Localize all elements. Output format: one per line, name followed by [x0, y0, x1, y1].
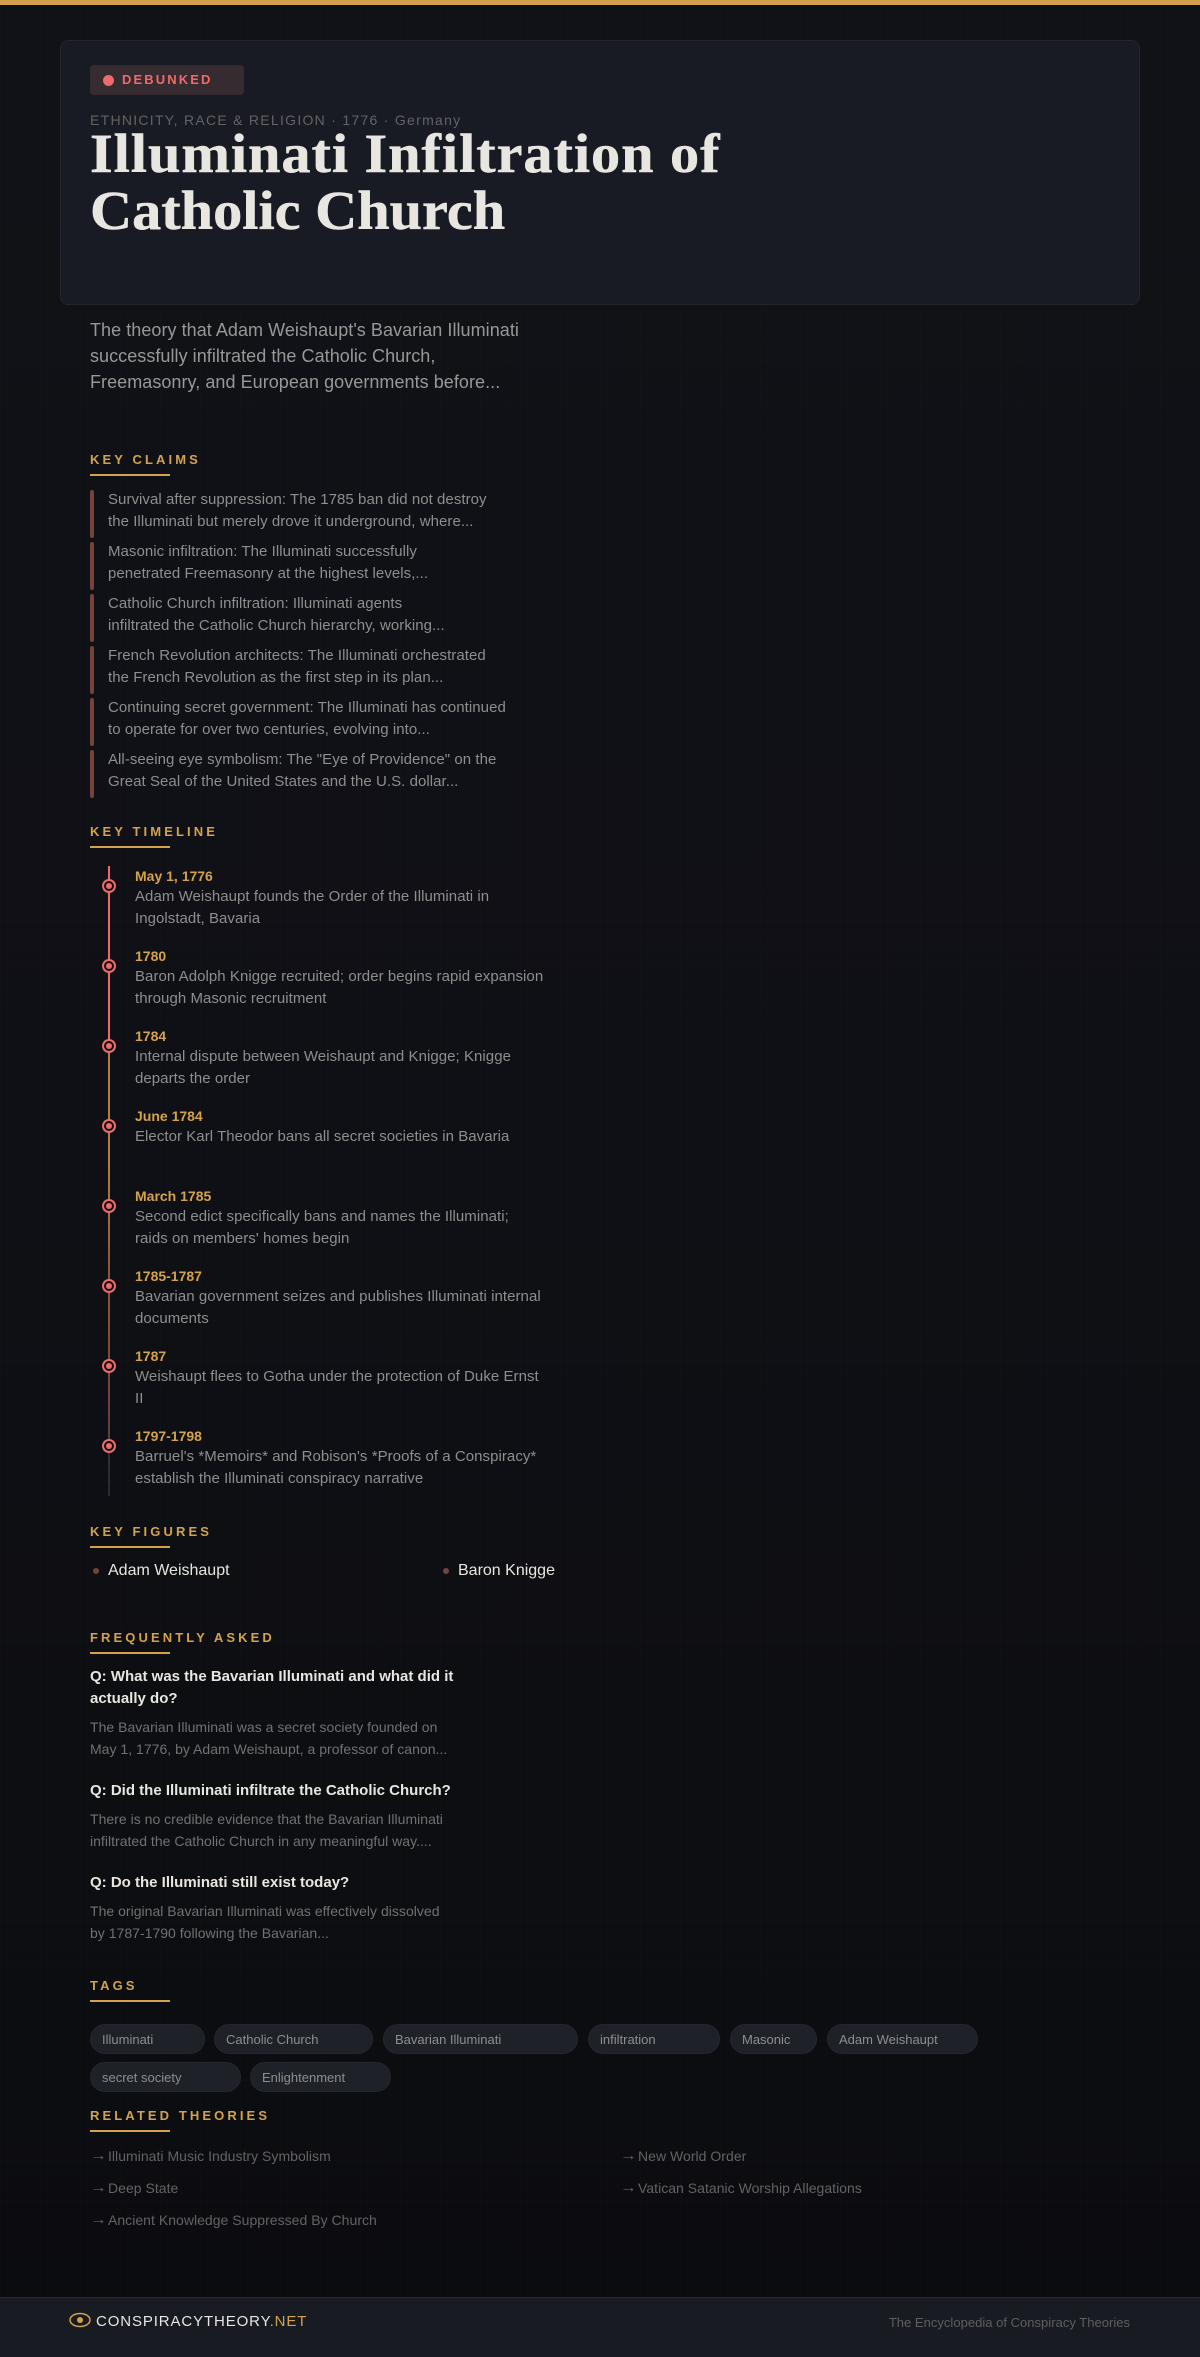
claim: secret government: to operate for over two centuries, evolving into... — [108, 721, 430, 738]
event: 1780: through Masonic recruitment — [135, 990, 326, 1007]
claim: secret government — [90, 698, 506, 746]
event: 1784: departs the order — [135, 1070, 250, 1087]
tag: infiltration: infiltration — [600, 2032, 656, 2047]
title — [90, 123, 721, 241]
event: June 1784: June 1784 — [135, 1108, 203, 1124]
event: 1785-1787: Bavarian government seizes and publishes Illuminati internal — [135, 1288, 541, 1305]
faq item 2: infiltrated the Catholic Church in any meaningful way.... — [90, 1833, 432, 1849]
tag: Masonic: Masonic — [742, 2032, 790, 2047]
claim: secret government: Continuing secret government: The Illuminati has continued — [108, 699, 506, 716]
tag list — [90, 2024, 978, 2092]
event: 1797-1798: Barruel's *Memoirs* and Robison's *Proofs of a Conspiracy* — [135, 1448, 536, 1465]
title: Illuminati Infiltration of — [90, 123, 721, 184]
event: 1780 — [102, 948, 543, 1007]
badge label: DEBUNKED — [122, 72, 212, 87]
tag: Enlightenment — [250, 2062, 391, 2092]
event: 1780: 1780 — [135, 948, 166, 964]
claim: survival: the Illuminati but merely drove it underground, where... — [108, 513, 474, 530]
faq item 1: Q: What was the Bavarian Illuminati and what did it — [90, 1668, 453, 1685]
tag: Adam Weishaupt: Adam Weishaupt — [839, 2032, 938, 2047]
event: 1780: Baron Adolph Knigge recruited; order begins rapid expansion — [135, 968, 543, 985]
tag: Catholic Church: Catholic Church — [226, 2032, 318, 2047]
figure: Adam Weishaupt: Adam Weishaupt — [108, 1562, 230, 1579]
claim: french revolution — [90, 646, 486, 694]
heading: frequently asked: FREQUENTLY ASKED — [90, 1630, 275, 1645]
claim: all-seeing eye — [90, 750, 496, 798]
event: 1797-1798: 1797-1798 — [135, 1428, 202, 1444]
icon: eye logo — [69, 2312, 91, 2328]
claim: survival: Survival after suppression: The 1785 ban did not destroy — [108, 491, 487, 508]
figure: Baron Knigge: Baron Knigge — [458, 1562, 555, 1579]
faq item 1: actually do? — [90, 1690, 178, 1707]
summary paragraph — [90, 320, 519, 392]
event: 1785-1787 — [102, 1268, 541, 1327]
footer — [0, 2297, 1200, 2357]
summary paragraph: The theory that Adam Weishaupt's Bavarian Illuminati — [90, 320, 519, 340]
event: 1787: II — [135, 1390, 143, 1407]
event: March 1785: March 1785 — [135, 1188, 211, 1204]
tag: secret society — [90, 2062, 241, 2092]
tag: Bavarian Illuminati — [383, 2024, 578, 2054]
link: Illuminati Music Industry Symbolism: → — [90, 2147, 107, 2163]
link: Deep State: Deep State — [108, 2180, 178, 2196]
summary paragraph: successfully infiltrated the Catholic Church, — [90, 346, 435, 366]
tag: Catholic Church — [214, 2024, 373, 2054]
event: May 1, 1776: Ingolstadt, Bavaria — [135, 910, 260, 927]
icon: status dot — [103, 75, 114, 86]
tag: Illuminati: Illuminati — [102, 2032, 153, 2047]
category and date meta line: ETHNICITY, RACE & RELIGION · 1776 · Germany — [90, 112, 461, 128]
link: Illuminati Music Industry Symbolism: Illuminati Music Industry Symbolism — [108, 2148, 331, 2164]
heading: tags: TAGS — [90, 1978, 138, 1993]
event: 1784 — [102, 1028, 511, 1087]
summary paragraph: Freemasonry, and European governments before... — [90, 372, 500, 392]
tag: Enlightenment: Enlightenment — [262, 2070, 345, 2085]
link: New World Order: New World Order — [638, 2148, 746, 2164]
event: June 1784 — [102, 1108, 510, 1145]
tag: Bavarian Illuminati: Bavarian Illuminati — [395, 2032, 501, 2047]
tag: Illuminati — [90, 2024, 205, 2054]
claim: catholic church — [90, 594, 445, 642]
claim: catholic church: Catholic Church infiltration: Illuminati agents — [108, 595, 402, 612]
heading: related theories: RELATED THEORIES — [90, 2108, 270, 2123]
title: Catholic Church — [90, 180, 505, 241]
event: 1785-1787: 1785-1787 — [135, 1268, 202, 1284]
link: Deep State: → — [90, 2179, 107, 2195]
faq item 3: by 1787-1790 following the Bavarian... — [90, 1925, 329, 1941]
event: March 1785: Second edict specifically bans and names the Illuminati; — [135, 1208, 509, 1225]
event: 1797-1798 — [102, 1428, 536, 1487]
event: March 1785: raids on members' homes begin — [135, 1230, 349, 1247]
link: Vatican Satanic Worship Allegations: Vatican Satanic Worship Allegations — [638, 2180, 862, 2196]
event: 1787: 1787 — [135, 1348, 166, 1364]
tag: Adam Weishaupt — [827, 2024, 978, 2054]
event: 1784: Internal dispute between Weishaupt and Knigge; Knigge — [135, 1048, 511, 1065]
tag: Masonic — [730, 2024, 817, 2054]
related theories list — [90, 2147, 862, 2228]
link: Vatican Satanic Worship Allegations: → — [620, 2179, 637, 2195]
panel: key claims list — [90, 490, 506, 798]
claim: all-seeing eye: All-seeing eye symbolism: The "Eye of Providence" on the — [108, 751, 496, 768]
top accent bar — [0, 0, 1200, 5]
link: New World Order: → — [620, 2147, 637, 2163]
event: May 1, 1776: Adam Weishaupt founds the Order of the Illuminati in — [135, 888, 489, 905]
claim: catholic church: infiltrated the Catholic Church hierarchy, working... — [108, 617, 445, 634]
claim: masonic — [90, 542, 428, 590]
claim: french revolution: French Revolution architects: The Illuminati orchestrated — [108, 647, 486, 664]
event: May 1, 1776 — [102, 868, 489, 927]
claim: masonic: penetrated Freemasonry at the highest levels,... — [108, 565, 428, 582]
faq item 1 — [90, 1668, 454, 1757]
brand name: CONSPIRACYTHEORY.NET — [96, 2313, 307, 2330]
claim: french revolution: the French Revolution as the first step in its plan... — [108, 669, 443, 686]
claim: all-seeing eye: Great Seal of the United States and the U.S. dollar... — [108, 773, 458, 790]
link: Ancient Knowledge Suppressed By Church: Ancient Knowledge Suppressed By Church — [108, 2212, 377, 2228]
event: March 1785 — [102, 1188, 509, 1247]
faq item 1: May 1, 1776, by Adam Weishaupt, a professor of canon... — [90, 1741, 447, 1757]
faq item 3: The original Bavarian Illuminati was effectively dissolved — [90, 1903, 440, 1919]
faq item 2: There is no credible evidence that the Bavarian Illuminati — [90, 1811, 443, 1827]
faq item 3 — [90, 1874, 440, 1941]
heading: key figures: KEY FIGURES — [90, 1524, 212, 1539]
tag: secret society: secret society — [102, 2070, 181, 2085]
event: 1787: Weishaupt flees to Gotha under the protection of Duke Ernst — [135, 1368, 539, 1385]
event: May 1, 1776: May 1, 1776 — [135, 868, 213, 884]
heading: key claims: KEY CLAIMS — [90, 452, 201, 467]
event: 1787 — [102, 1348, 539, 1407]
timeline spine — [108, 866, 110, 1496]
event: June 1784: Elector Karl Theodor bans all secret societies in Bavaria — [135, 1128, 509, 1145]
event: 1784: 1784 — [135, 1028, 166, 1044]
event: 1797-1798: establish the Illuminati conspiracy narrative — [135, 1470, 423, 1487]
badge: debunked — [90, 65, 244, 95]
faq item 2 — [90, 1782, 451, 1849]
heading: key timeline: KEY TIMELINE — [90, 824, 218, 839]
faq item 2: Q: Did the Illuminati infiltrate the Catholic Church? — [90, 1782, 451, 1799]
event: 1785-1787: documents — [135, 1310, 209, 1327]
link: Ancient Knowledge Suppressed By Church: → — [90, 2211, 107, 2227]
tag: infiltration — [588, 2024, 720, 2054]
claim: survival — [90, 490, 487, 538]
faq item 3: Q: Do the Illuminati still exist today? — [90, 1874, 349, 1891]
faq item 1: The Bavarian Illuminati was a secret society founded on — [90, 1719, 437, 1735]
footer tagline: The Encyclopedia of Conspiracy Theories — [889, 2315, 1130, 2330]
claim: masonic: Masonic infiltration: The Illuminati successfully — [108, 543, 417, 560]
panel: hero header — [60, 40, 1140, 305]
panel: timeline — [102, 866, 543, 1496]
